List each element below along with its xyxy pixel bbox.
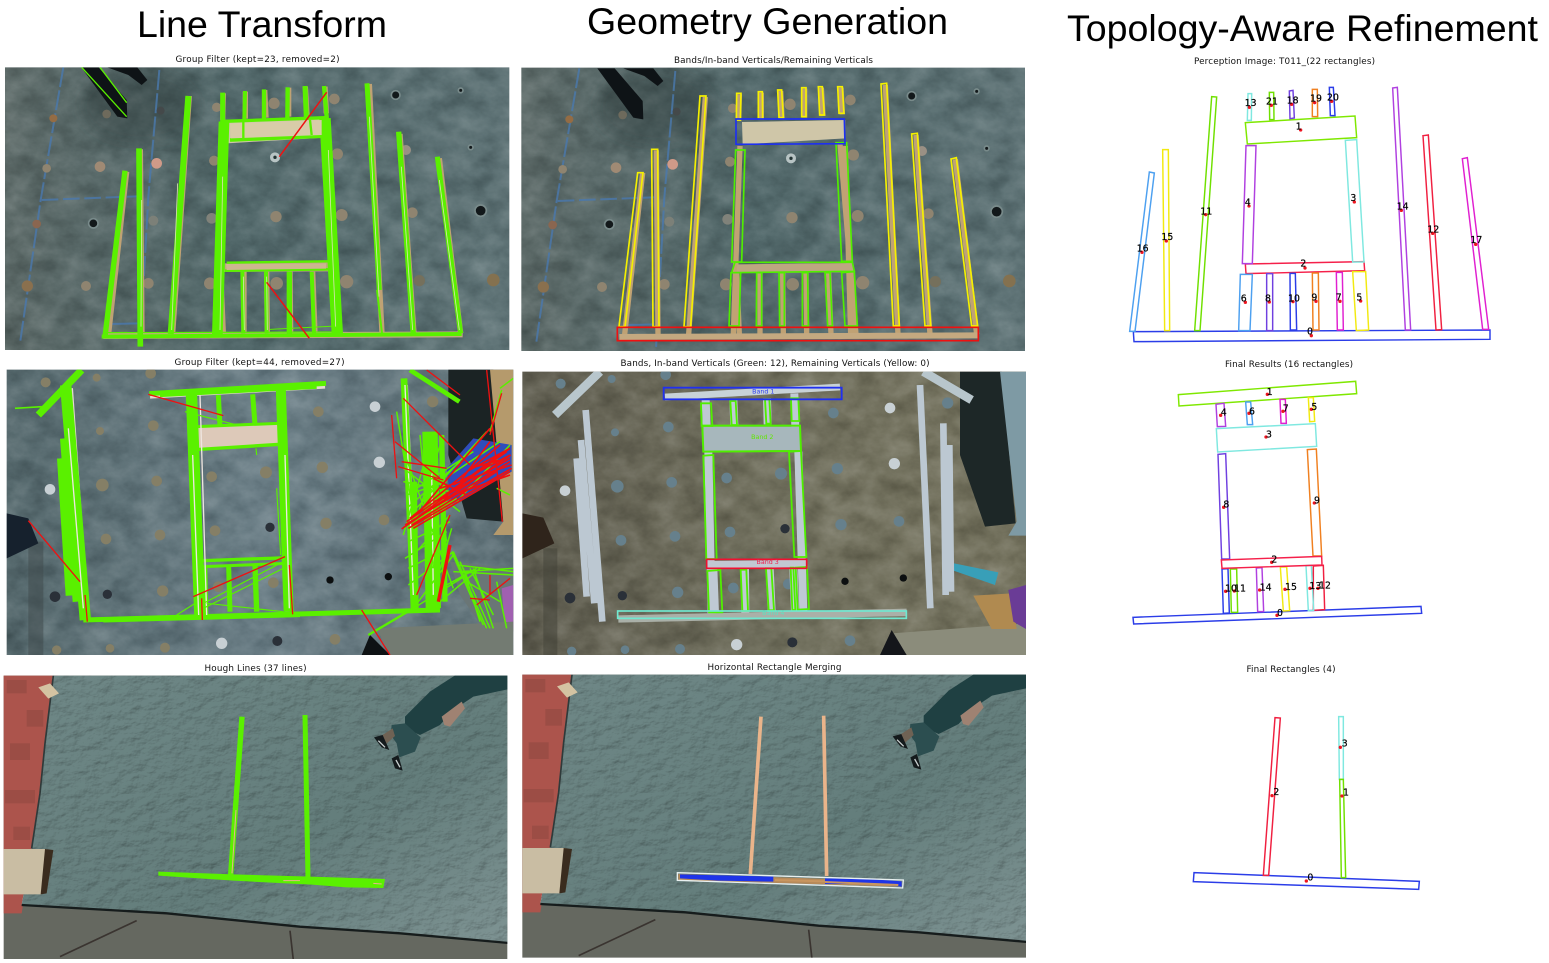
- caption: group filter top: Group Filter (kept=23, removed=2): [176, 55, 340, 65]
- rectangle index numbers: 2: [1300, 259, 1306, 270]
- rectangle index numbers: 1: [1343, 787, 1349, 798]
- wooden verticals: [750, 716, 827, 876]
- rectangle index numbers: 13: [1245, 98, 1257, 109]
- merged rectangle outline: [677, 873, 903, 888]
- rectangle index numbers: 10: [1225, 584, 1237, 595]
- rectangle index numbers: 0: [1307, 872, 1313, 883]
- band 1 outline blue: [664, 388, 842, 399]
- band labels: [751, 389, 784, 617]
- panel: horizontal rectangle merging on tarp: [519, 669, 1039, 962]
- rectangle index numbers: 14: [1260, 583, 1272, 594]
- caption: perception image: Perception Image: T011_(22 rectangles): [1194, 57, 1375, 67]
- rectangle index numbers: 15: [1161, 232, 1173, 243]
- band labels: Band 4: [762, 610, 784, 617]
- rectangle index numbers: 2: [1271, 555, 1277, 566]
- rectangle index numbers: 3: [1342, 738, 1348, 749]
- title: Geometry Generation: Geometry Generation: [587, 1, 948, 42]
- band 2 outline green: [702, 426, 801, 452]
- rectangle index numbers: 6: [1249, 406, 1255, 417]
- rectangle index numbers: 12: [1427, 224, 1439, 235]
- band outlined blue: [736, 119, 845, 144]
- rectangle index numbers: 9: [1314, 496, 1320, 507]
- rejected red line segments: [267, 92, 327, 338]
- caption: bands top: Bands/In-band Verticals/Remaining Verticals: [674, 56, 873, 66]
- thin green lines inside window: [177, 412, 283, 615]
- rectangle index numbers: 18: [1287, 95, 1299, 106]
- rectangle index numbers: 13: [1309, 581, 1321, 592]
- rectangle index numbers: 3: [1266, 430, 1272, 441]
- rectangle index numbers: [1137, 93, 1482, 337]
- rectangle index numbers: 4: [1221, 408, 1227, 419]
- rectangle index numbers: 1: [1296, 121, 1302, 132]
- rectangle outlines: [1133, 381, 1422, 624]
- rectangle index numbers: 9: [1311, 292, 1317, 303]
- remaining verticals outlined yellow: [619, 83, 978, 327]
- diagram: final rectangles of beams: [1193, 717, 1419, 889]
- rectangle index numbers: 8: [1265, 293, 1271, 304]
- detected green line segments: [82, 67, 462, 347]
- caption: hough lines: Hough Lines (37 lines): [204, 664, 306, 674]
- caption: final rectangles: Final Rectangles (4): [1246, 665, 1336, 675]
- green detected beams: [231, 715, 308, 878]
- panel: hough lines on tarp: [0, 670, 520, 963]
- white frame members: [70, 385, 414, 618]
- rectangle index numbers: 0: [1277, 608, 1283, 619]
- rectangle index numbers: 11: [1234, 584, 1246, 595]
- rectangle index numbers: 1: [1267, 387, 1273, 398]
- diagram: final rectangles of white frame: [1133, 381, 1422, 624]
- rectangle index numbers: 14: [1397, 201, 1409, 212]
- rectangle index numbers: 12: [1319, 580, 1331, 591]
- panel: line detection on white frame: [0, 368, 520, 658]
- title: Topology-Aware Refinement: Topology-Aware Refinement: [1067, 8, 1539, 49]
- rectangle index numbers: 11: [1200, 206, 1212, 217]
- rectangle index numbers: 7: [1336, 292, 1342, 303]
- panel: bands on white frame: [515, 368, 1035, 658]
- rectangle index numbers: 21: [1266, 96, 1278, 107]
- caption: final results: Final Results (16 rectangles): [1225, 360, 1353, 370]
- rectangle index numbers: 2: [1273, 787, 1279, 798]
- rectangle index numbers: 16: [1137, 244, 1149, 255]
- caption: group filter middle: Group Filter (kept=44, removed=27): [174, 358, 344, 368]
- caption: bands middle: Bands, In-band Verticals (Green: 12), Remaining Verticals (Yellow: 0): [620, 359, 930, 369]
- rectangle index numbers: 3: [1350, 193, 1356, 204]
- panel: line detection on wall frame: [0, 63, 520, 353]
- rectangle index numbers: 10: [1288, 293, 1300, 304]
- in-band verticals outlined green: [701, 398, 809, 612]
- band labels: Band 3: [757, 559, 779, 566]
- center dots: [1219, 393, 1320, 617]
- rectangle index numbers: 15: [1285, 582, 1297, 593]
- rectangle index numbers: 17: [1470, 235, 1482, 246]
- title: Line Transform: Line Transform: [137, 4, 387, 45]
- rectangle index numbers: 0: [1307, 326, 1313, 337]
- merged beam: [678, 874, 902, 887]
- rectangle index numbers: [1221, 387, 1331, 619]
- band labels: Band 2: [751, 434, 773, 441]
- tangled green lines on clutter: [397, 378, 513, 628]
- rectangle index numbers: 20: [1327, 93, 1339, 104]
- band outlined red: [617, 327, 978, 341]
- detected green lines: [15, 370, 459, 635]
- rectangle index numbers: 5: [1311, 402, 1317, 413]
- caption: horizontal merging: Horizontal Rectangle Merging: [708, 663, 842, 673]
- band 4 outline cyan: [618, 611, 906, 618]
- rectangle outlines: [1193, 717, 1419, 889]
- rectangle index numbers: 8: [1223, 500, 1229, 511]
- pale beams: [577, 385, 951, 622]
- rectangle index numbers: 4: [1245, 197, 1251, 208]
- band 3 outline red: [707, 559, 807, 568]
- center dots: [1270, 746, 1344, 883]
- panel: bands and verticals on wall frame: [516, 64, 1036, 354]
- rectangle index numbers: [1273, 738, 1349, 883]
- band labels: Band 1: [752, 389, 774, 396]
- rectangle index numbers: 19: [1310, 94, 1322, 105]
- rectangle outlines: [1130, 87, 1490, 342]
- rejected red lines: [28, 370, 510, 655]
- rectangle index numbers: 7: [1283, 403, 1289, 414]
- rectangle index numbers: 6: [1241, 293, 1247, 304]
- center dots: [1140, 100, 1477, 337]
- rectangle index numbers: 5: [1356, 292, 1362, 303]
- in-band verticals outlined green: [729, 143, 857, 326]
- diagram: perception rectangles: [1130, 87, 1490, 342]
